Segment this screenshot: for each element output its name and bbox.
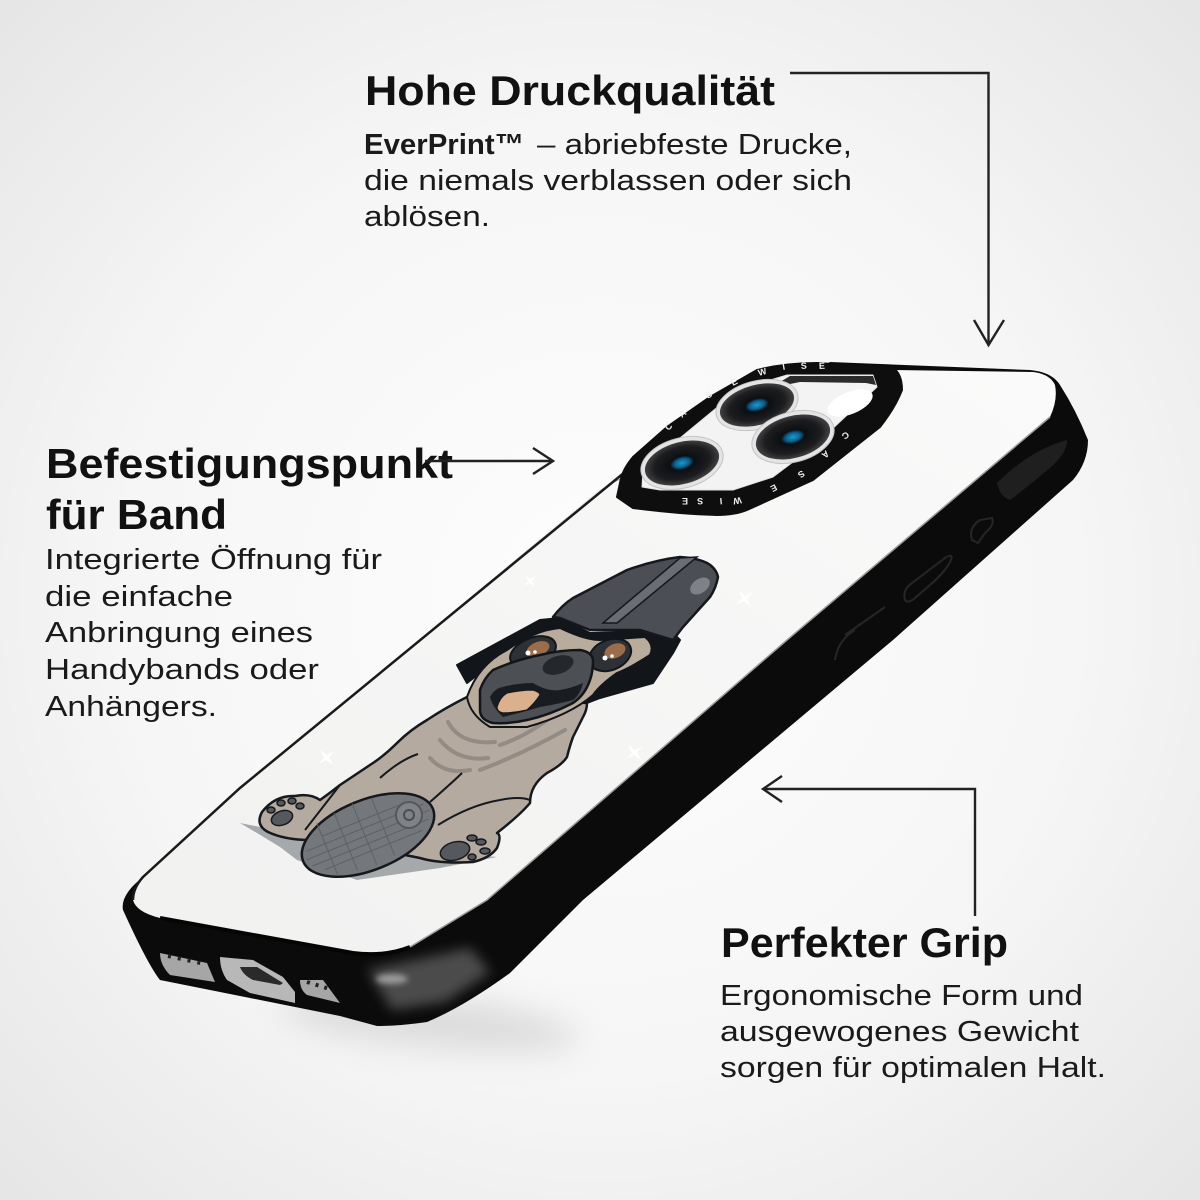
- body: [260, 697, 587, 862]
- lens left: [635, 428, 729, 498]
- helmet dome: [553, 557, 718, 640]
- stars: [318, 575, 753, 765]
- eye left: [506, 630, 560, 674]
- description: [720, 980, 1106, 1084]
- arrow: grip pointing at phone side: [763, 776, 975, 916]
- paw pads right: [438, 835, 490, 864]
- brand lettering: A: [677, 407, 689, 420]
- heading block: Hohe Druckqualität: [364, 67, 852, 233]
- glossy bottom corner: [368, 948, 490, 1010]
- eye right: [584, 633, 636, 677]
- panel edge line: [133, 472, 625, 900]
- description: ablösen.: [364, 201, 490, 233]
- heading block: Befestigungspunkt: [45, 440, 453, 723]
- side buttons: [835, 518, 993, 660]
- heading block: Perfekter Grip: [720, 919, 1106, 1084]
- brand lettering: I: [782, 362, 786, 372]
- tongue: [497, 690, 540, 713]
- description: die niemals verblassen oder sich: [364, 165, 852, 197]
- camera ring: [617, 363, 902, 515]
- brand lettering: I: [719, 496, 723, 506]
- brand lettering: E: [819, 361, 825, 371]
- brand lettering: E: [729, 376, 739, 388]
- glare on edge: [410, 417, 1050, 947]
- description: sorgen für optimalen Halt.: [720, 1052, 1106, 1084]
- description: Anhängers.: [45, 691, 217, 723]
- helmet ridge: [603, 557, 697, 623]
- bottom port: right speaker holes: [307, 982, 333, 990]
- ground shadow: [240, 823, 497, 880]
- brand lettering: W: [757, 366, 768, 378]
- camera window: [642, 375, 877, 490]
- arrow: top to camera corner: [790, 73, 1004, 345]
- window shadow: [770, 376, 876, 388]
- paw pads left: [267, 798, 304, 828]
- heading: [46, 440, 453, 538]
- description: EverPrint™: [364, 129, 524, 161]
- helmet mask: [457, 618, 680, 703]
- lens top: [710, 371, 804, 439]
- description: ausgewogenes Gewicht: [720, 1016, 1079, 1048]
- brand lettering: E: [682, 496, 688, 506]
- description: Integrierte Öffnung für: [45, 544, 382, 576]
- flash: [824, 384, 876, 422]
- limb lines: [305, 754, 530, 830]
- bottom port: left speaker holes: [168, 956, 205, 964]
- face: [467, 628, 652, 727]
- bottom port: charging: [220, 957, 295, 1003]
- muzzle: [480, 650, 593, 723]
- arrow: to strap attachment point: [425, 448, 553, 474]
- brand lettering: E: [769, 482, 779, 494]
- heading: Perfekter Grip: [721, 919, 1008, 966]
- brand lettering: A: [819, 448, 831, 461]
- brand lettering: [663, 361, 851, 506]
- brand lettering: S: [800, 361, 807, 371]
- brand lettering: W: [732, 495, 742, 506]
- phone shadow: [278, 980, 582, 1064]
- heading: für Band: [46, 491, 227, 538]
- heading: Befestigungspunkt: [46, 440, 453, 487]
- description: Handybands oder: [45, 654, 319, 686]
- top right side detail: [997, 440, 1067, 500]
- brand lettering: S: [703, 389, 714, 401]
- phone case: [123, 361, 1088, 1026]
- description: Anbringung eines: [45, 617, 313, 649]
- description: – abriebfeste Drucke,: [537, 129, 852, 161]
- brand lettering: S: [697, 496, 703, 506]
- heading: Hohe Druckqualität: [365, 67, 775, 114]
- description: [45, 544, 382, 723]
- helmet vent: [687, 574, 713, 598]
- case body: [123, 362, 1088, 1026]
- description: die einfache: [45, 581, 233, 613]
- printed pug illustration: [240, 557, 753, 894]
- bottom port: charging opening: [240, 967, 283, 985]
- description: [364, 129, 852, 233]
- brand lettering: C: [839, 429, 851, 442]
- neck folds: [430, 710, 565, 771]
- nose: [540, 651, 576, 679]
- bottom port: left speaker: [160, 953, 215, 982]
- back panel: [133, 366, 1056, 954]
- mouth: [490, 683, 583, 717]
- lens right: [746, 402, 840, 472]
- death star disc: [290, 776, 446, 894]
- brand lettering: S: [796, 468, 807, 480]
- camera island: [617, 361, 902, 515]
- bottom port: right speaker: [300, 980, 340, 1003]
- panel lower edge: [160, 918, 410, 954]
- brand lettering: C: [663, 420, 675, 433]
- description: Ergonomische Form und: [720, 980, 1083, 1012]
